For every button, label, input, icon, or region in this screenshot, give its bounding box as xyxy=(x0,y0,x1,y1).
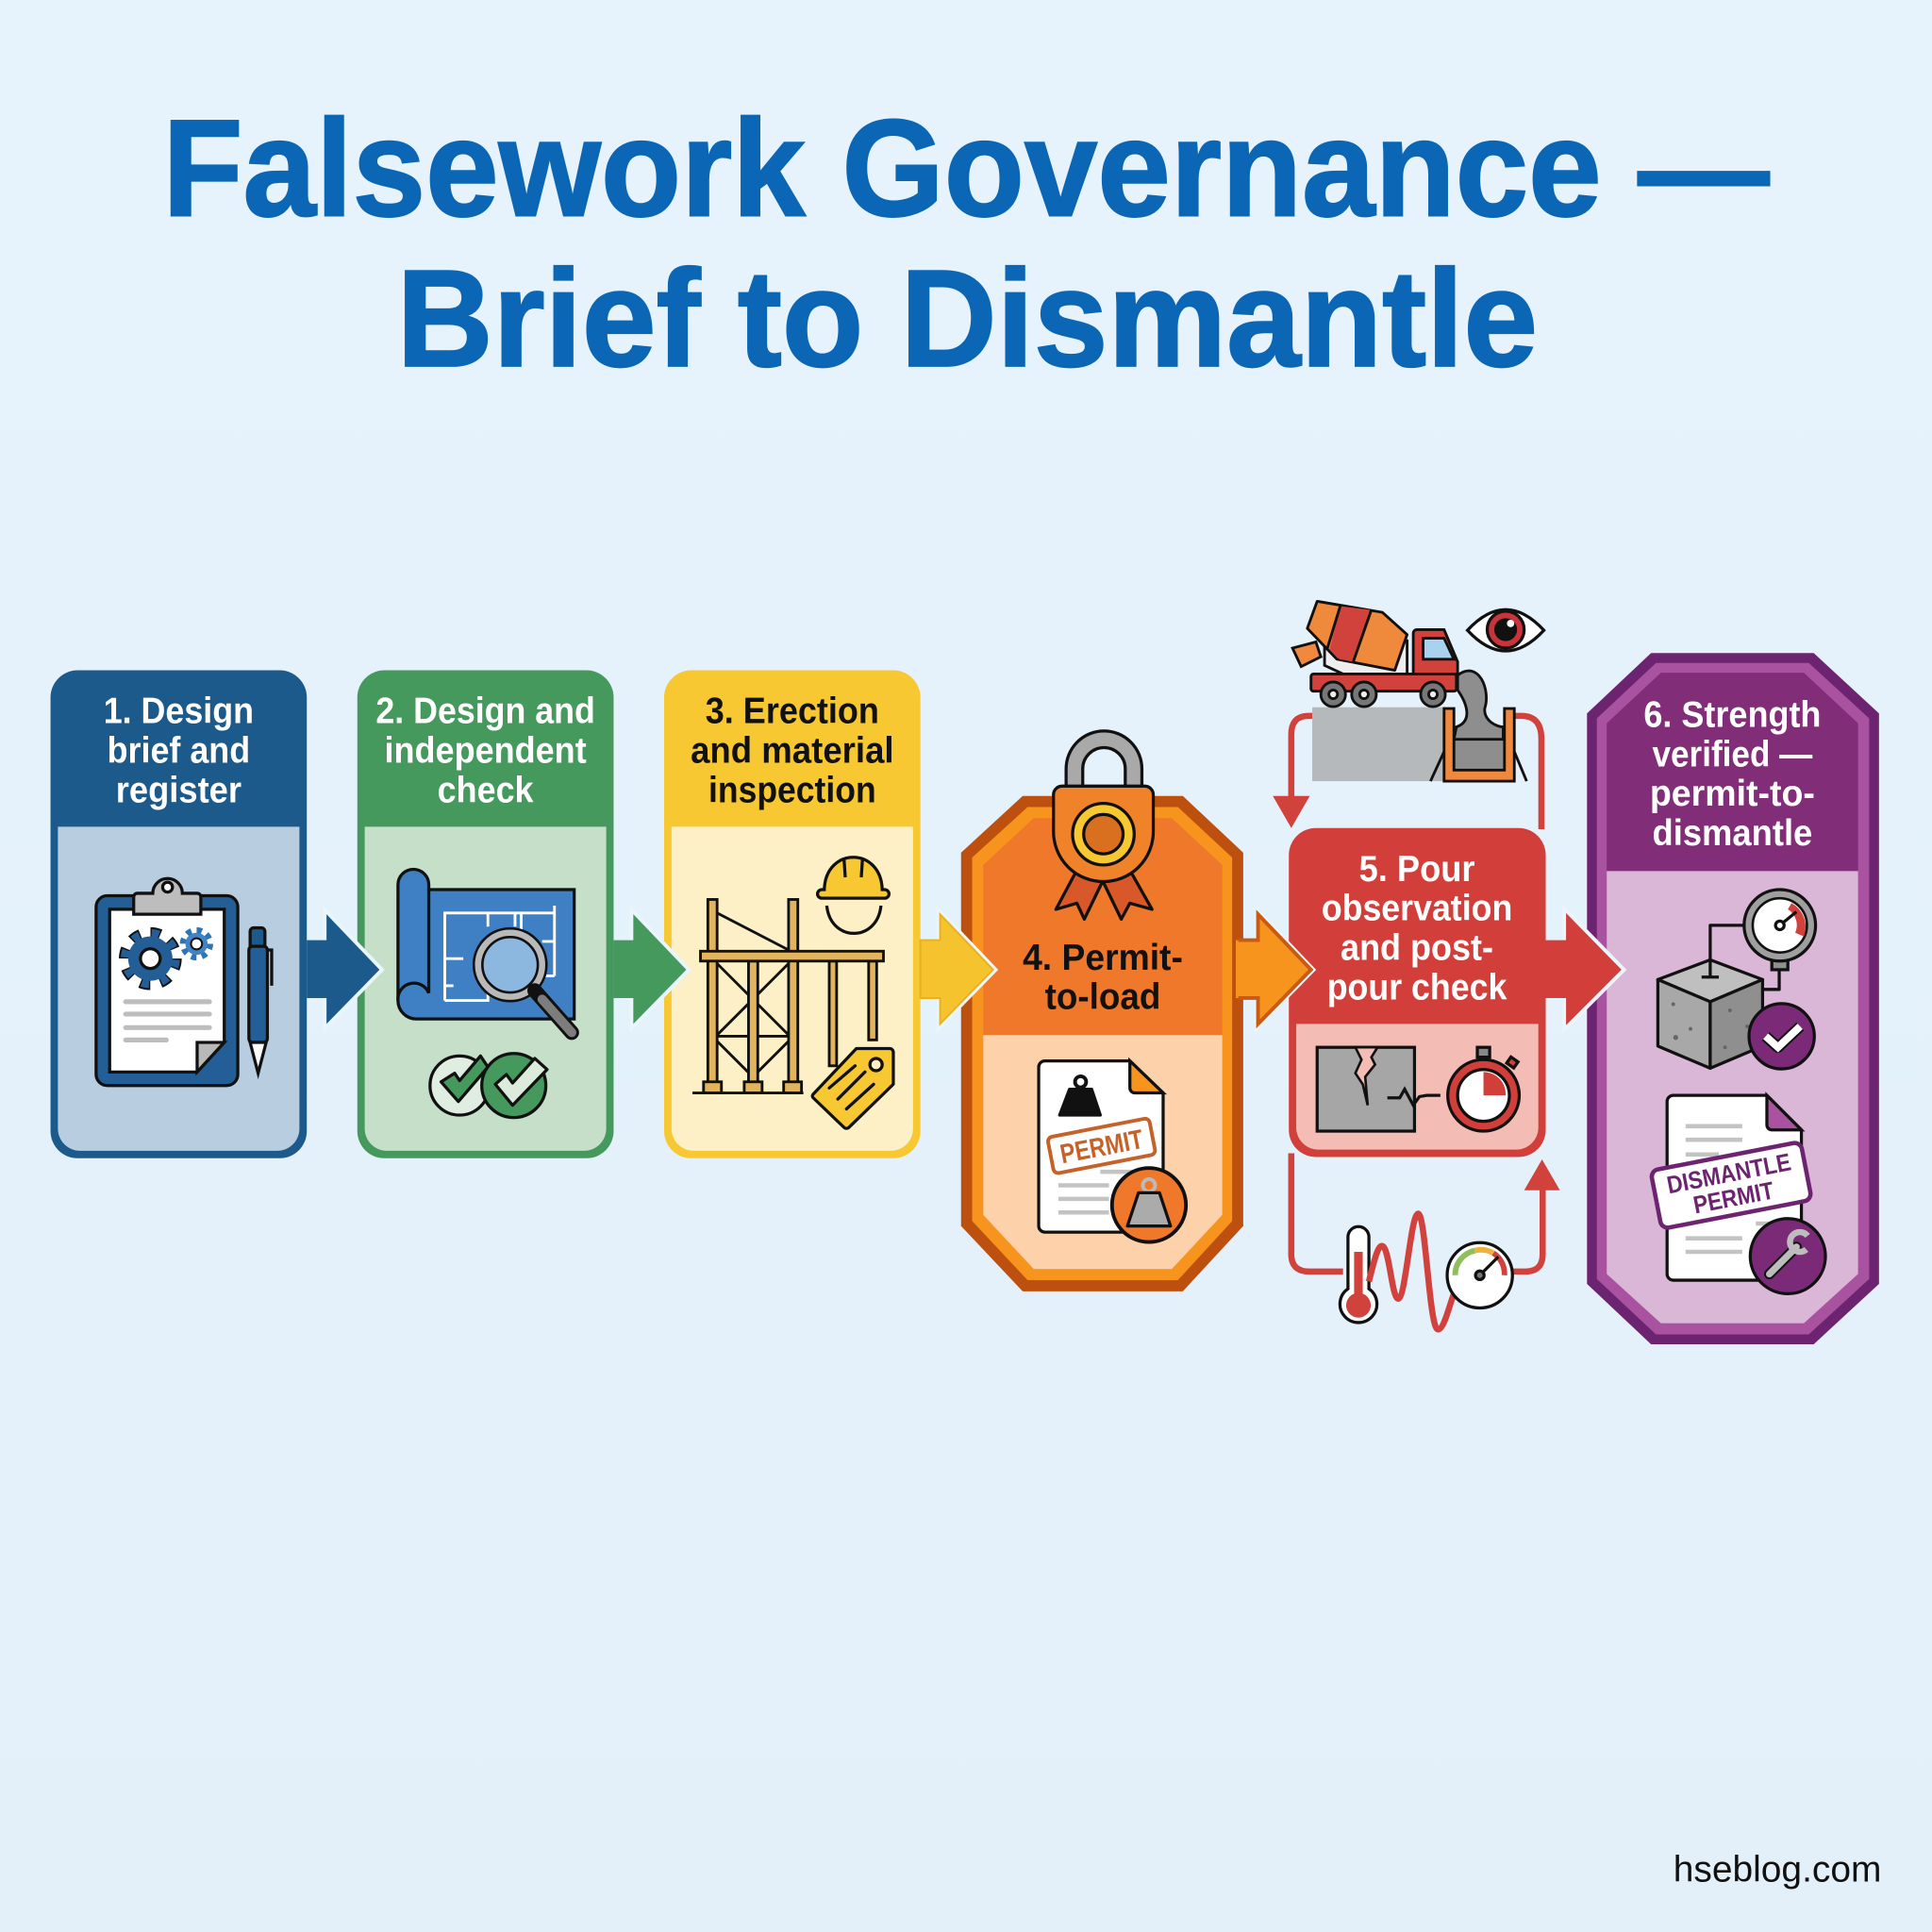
heading: step 5: 5. Pour xyxy=(1359,849,1474,890)
icon: concrete cube xyxy=(1657,925,1779,1068)
icon: cracked concrete xyxy=(1317,1047,1441,1131)
icon: pressure gauge xyxy=(1447,1242,1512,1307)
icon: wrench badge xyxy=(1750,1219,1825,1293)
arrow: step 3 to 4 xyxy=(921,914,993,1024)
arrow: bottom feedback loop xyxy=(1291,1154,1560,1272)
panel: step 4 permit-to-load xyxy=(961,740,1243,1291)
heading: step 5 xyxy=(1322,849,1512,1008)
icon: padlock seal with ribbons xyxy=(1054,740,1154,919)
stamp: dismantle permit: PERMIT xyxy=(1690,1175,1776,1219)
icon: pen xyxy=(249,928,272,1074)
icon: verified check badge xyxy=(1749,1004,1814,1069)
heading: step 2: independent xyxy=(385,730,587,771)
stamp: dismantle permit: DISMANTLE xyxy=(1664,1147,1793,1199)
icon: clipboard with gears xyxy=(96,878,238,1086)
icon: scaffold frame xyxy=(692,899,883,1093)
heading: step 5: and post- xyxy=(1341,927,1493,968)
stamp: permit: PERMIT xyxy=(1058,1124,1146,1170)
icon: double check marks xyxy=(430,1054,547,1118)
icon: dismantle document xyxy=(1667,1095,1802,1280)
heading: step 6: 6. Strength xyxy=(1643,695,1821,736)
heading: step 2: check xyxy=(438,770,534,810)
arrow: step 1 to 2 xyxy=(307,914,379,1024)
heading: step 6: verified — xyxy=(1653,734,1813,774)
heading: step 6: permit-to- xyxy=(1650,774,1815,814)
panel: step 6 strength verified and permit-to-dismantle xyxy=(1587,653,1879,1344)
heading: step 3 xyxy=(691,691,894,810)
panel: step 3 erection and material inspection xyxy=(664,671,921,1158)
icon: load weight badge xyxy=(1112,1168,1186,1242)
heading: step 2: 2. Design and xyxy=(375,691,595,732)
heading: step 2 xyxy=(375,691,595,810)
icon: concrete truck pouring into formwork xyxy=(1292,601,1526,781)
icon: hard hat inspector xyxy=(818,858,889,933)
heading: step 1: brief and xyxy=(108,730,250,771)
panel: step 1 design brief and register xyxy=(51,671,307,1158)
heading: step 3: inspection xyxy=(708,770,876,810)
arrow: top feedback loop xyxy=(1273,716,1541,829)
heading: step 1: register xyxy=(116,770,242,810)
arrow: step 2 to 3 xyxy=(613,914,687,1024)
stamp: dismantle permit xyxy=(1651,1141,1812,1229)
heading: step 5: pour check xyxy=(1327,967,1507,1008)
heading: step 1: 1. Design xyxy=(104,691,254,732)
heading: step 6 xyxy=(1643,695,1821,854)
heading: step 4 xyxy=(1023,938,1183,1018)
icon: observing eye xyxy=(1468,609,1544,651)
arrow: step 4 to 5 xyxy=(1236,914,1311,1024)
icon: strength gauge xyxy=(1744,890,1816,970)
footer: source credit: hseblog.com xyxy=(1674,1849,1881,1890)
panel: step 5 pour observation and post-pour check xyxy=(1289,828,1546,1157)
icon: thermometer xyxy=(1340,1226,1377,1323)
title: Falsework Governance — xyxy=(162,92,1770,245)
heading: step 6: dismantle xyxy=(1653,813,1812,854)
title xyxy=(162,92,1770,395)
heading: step 1 xyxy=(104,691,254,810)
heading: step 4: to-load xyxy=(1045,977,1160,1018)
heading: step 3: 3. Erection xyxy=(706,691,879,732)
icon: permit document xyxy=(1039,1061,1163,1232)
chart: monitoring wave xyxy=(1369,1214,1454,1329)
title: Brief to Dismantle xyxy=(397,242,1538,395)
panel: step 2 design and independent check xyxy=(358,671,613,1158)
heading: step 5: observation xyxy=(1322,889,1512,929)
heading: step 3: and material xyxy=(691,730,894,771)
icon: blueprint with magnifier xyxy=(398,869,575,1033)
arrow: step 5 to 6 xyxy=(1542,913,1622,1025)
icon: stopwatch xyxy=(1448,1047,1519,1131)
heading: step 4: 4. Permit- xyxy=(1023,938,1183,978)
icon: material tag xyxy=(812,1049,893,1128)
